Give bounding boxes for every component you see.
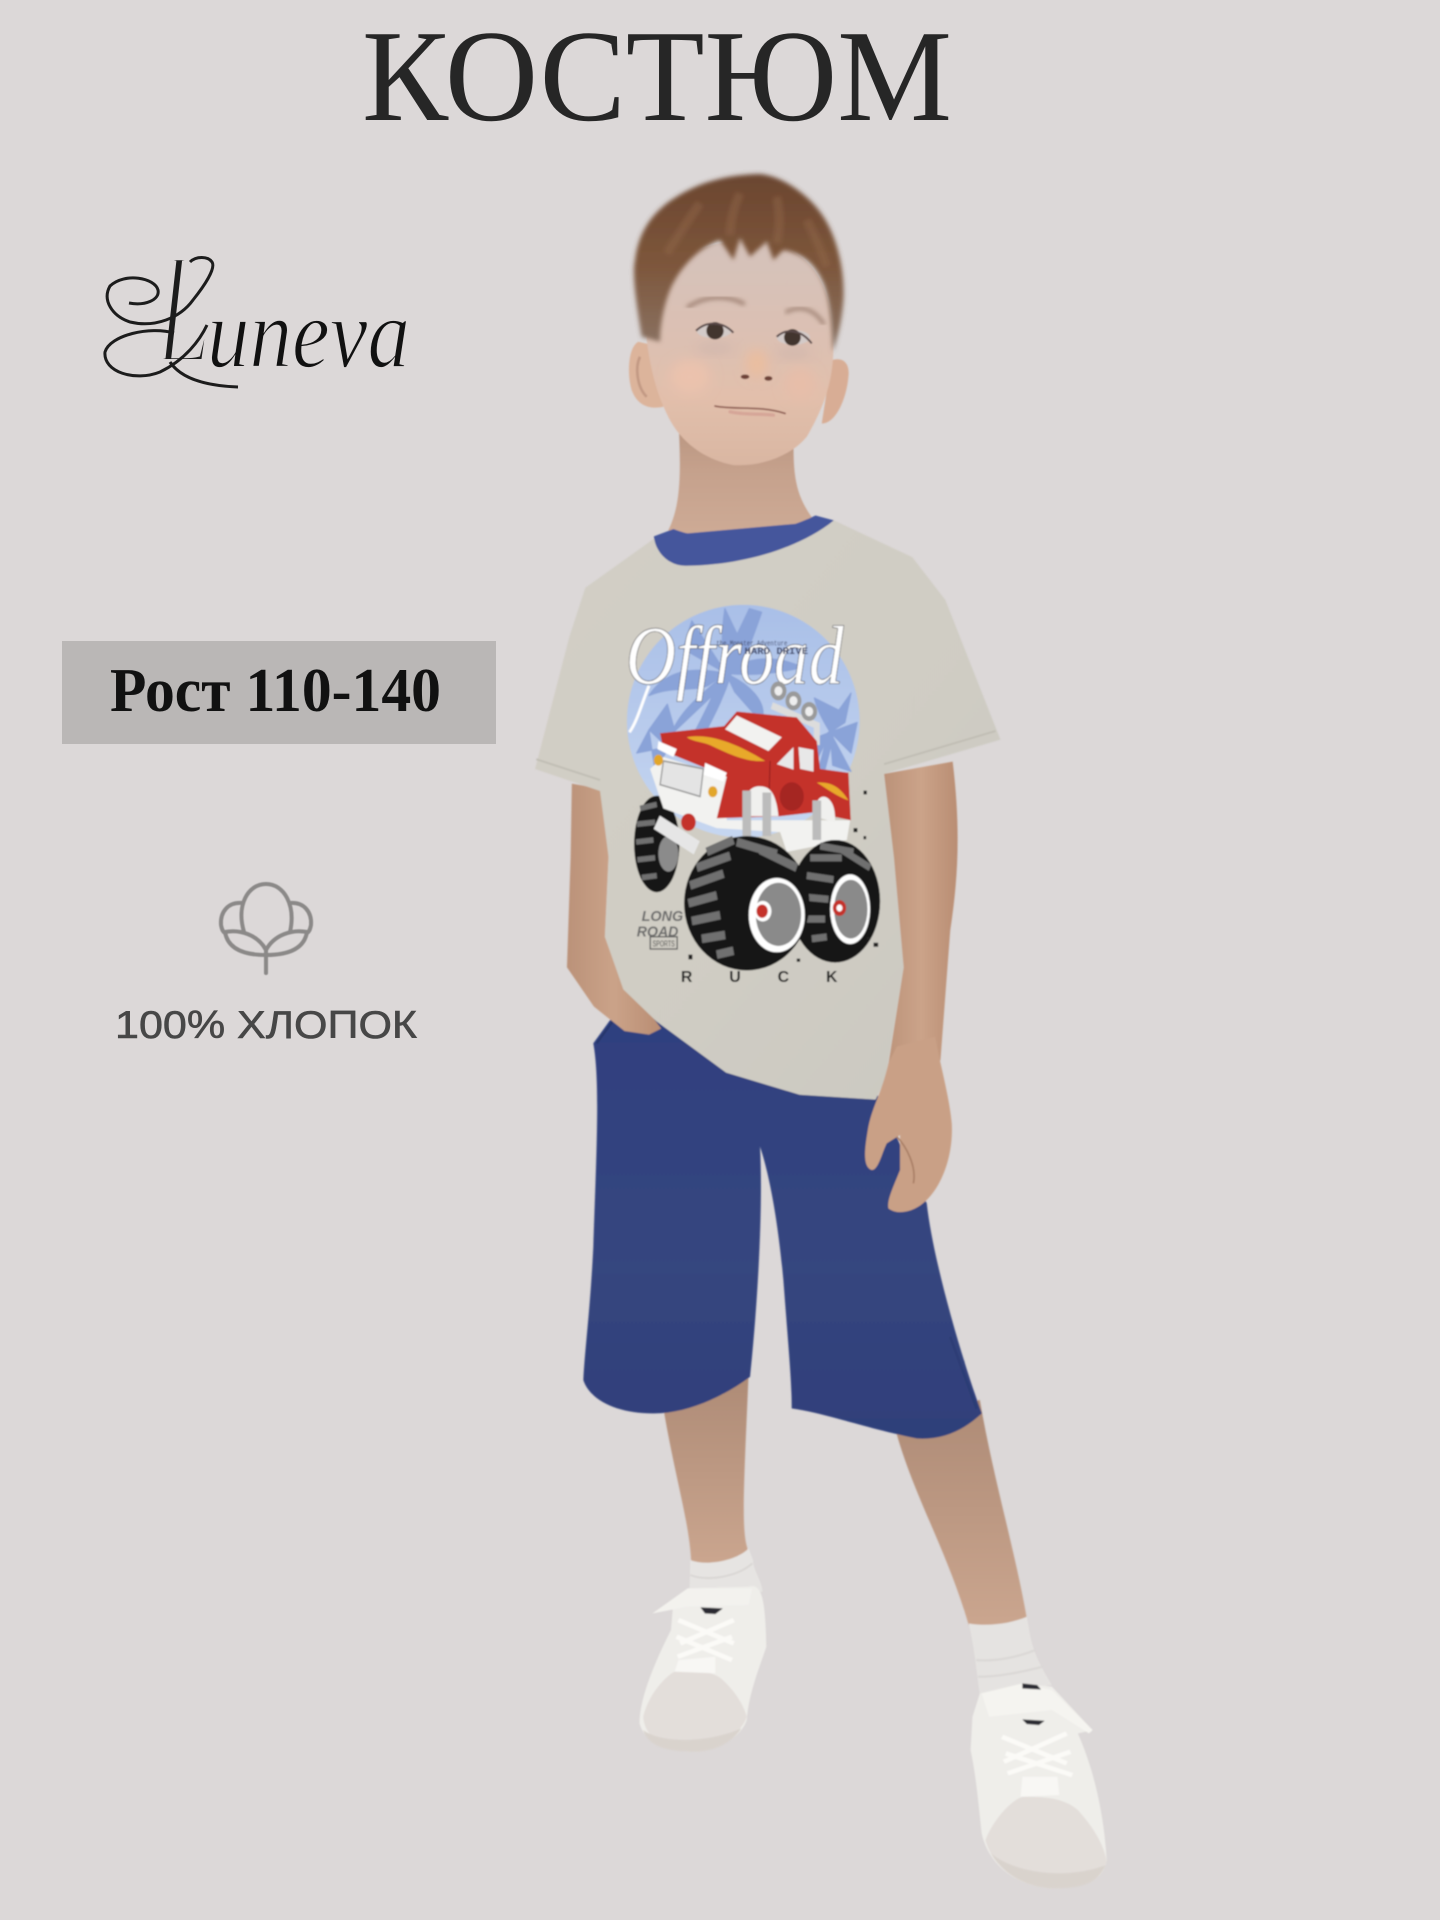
t-shirt print: small lettering: LONG	[642, 909, 683, 925]
grille	[660, 761, 703, 797]
mouth	[715, 406, 785, 413]
title: КОСТЮМ	[362, 4, 952, 149]
t-shirt print: script lettering: HARD DRIVE	[744, 646, 808, 657]
face	[646, 240, 833, 465]
height badge	[62, 641, 496, 744]
t-shirt collar	[654, 516, 834, 566]
t-shirt print: monster truck	[634, 681, 880, 970]
t-shirt print: small lettering: RUCK	[681, 969, 838, 986]
nose	[741, 374, 749, 379]
t-shirt print: palm trees	[637, 609, 857, 784]
eyebrows	[688, 298, 743, 307]
suspension	[747, 791, 817, 840]
legs, socks and sneakers	[639, 1373, 1107, 1888]
light bar	[772, 706, 817, 745]
brand logo: Luneva: L	[155, 219, 212, 397]
t-shirt	[535, 516, 1000, 1100]
t-shirt print: script lettering: Offroad	[626, 610, 844, 702]
red body	[660, 711, 851, 820]
head	[629, 174, 849, 465]
hair	[634, 174, 844, 352]
eyes	[697, 323, 731, 338]
t-shirt print: small lettering: ROAD	[637, 925, 679, 941]
rear right wheel	[790, 840, 880, 963]
boy figure	[535, 174, 1107, 1888]
t-shirt print: script lettering	[626, 610, 844, 732]
material label: 100% ХЛОПОК	[115, 1004, 417, 1047]
shorts	[583, 1013, 982, 1439]
white lower body	[650, 757, 850, 852]
height badge: Рост 110-140	[110, 657, 441, 725]
t-shirt print: script lettering: the Monster Adventure	[716, 640, 787, 648]
neck	[668, 420, 815, 547]
t-shirt print: small lettering	[637, 909, 838, 986]
rear left wheel	[634, 796, 679, 892]
arm right and hand	[865, 762, 958, 1212]
brand logo: Luneva: uneva	[207, 278, 410, 389]
t-shirt print: sun circle	[627, 605, 860, 838]
ears	[629, 342, 663, 408]
mud splatter	[688, 791, 878, 962]
front right wheel	[684, 836, 809, 970]
arm left	[567, 784, 661, 1035]
icon: cotton boll	[221, 884, 311, 973]
t-shirt print: small lettering: SPORTS	[653, 939, 675, 949]
brand logo: Luneva	[105, 219, 410, 397]
